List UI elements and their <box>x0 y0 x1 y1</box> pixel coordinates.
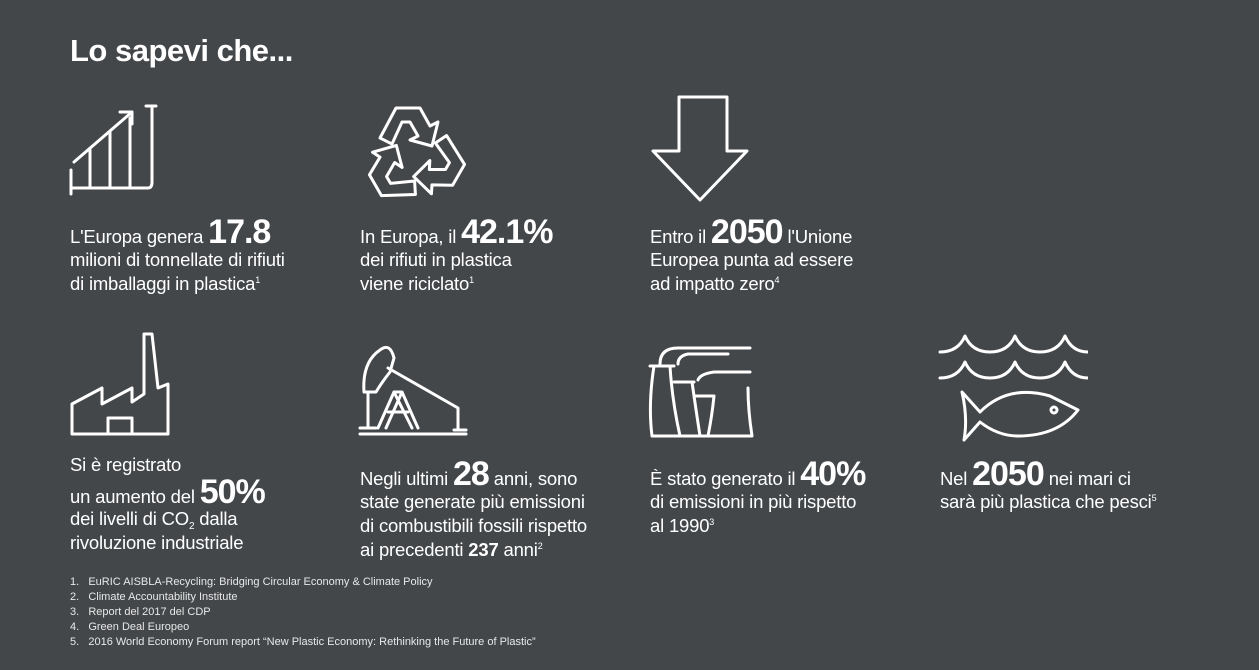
text: more plastic than fish <box>940 455 1156 512</box>
text: 28 years: di combustibili fossili rispetto <box>360 515 587 536</box>
icon: factory <box>70 332 170 436</box>
text: 40%: al 19903 <box>650 515 714 536</box>
text: 28 years: Negli ultimi 28 anni, sono <box>360 455 577 493</box>
text: 2050 zero impact <box>650 213 853 294</box>
text: 17.8: L'Europa genera 17.8 <box>70 213 270 251</box>
footnotes: 3. Report del 2017 del CDP <box>70 606 211 618</box>
text: 50% CO2 <box>70 454 265 553</box>
icon: power plant <box>648 346 754 438</box>
text: 2050 zero impact: Europea punta ad essere <box>650 249 853 270</box>
text: 28 years: state generate più emissioni <box>360 491 585 512</box>
text: 42.1%: viene riciclato1 <box>360 273 474 294</box>
text: 42.1%: In Europa, il 42.1% <box>360 213 552 251</box>
text: 42.1% <box>360 213 553 294</box>
icon: waves and fish <box>938 334 1088 442</box>
footnotes: 5. 2016 World Economy Forum report “New Plastic Economy: Rethinking the Future of Plastic” <box>70 636 536 648</box>
text: 17.8: milioni di tonnellate di rifiuti <box>70 249 285 270</box>
title: Lo sapevi che... <box>70 33 293 68</box>
text: 28 years <box>360 455 587 560</box>
footnotes: 1. EuRIC AISBLA-Recycling: Bridging Circular Economy & Climate Policy <box>70 576 433 588</box>
text: 50% CO2: dei livelli di CO2 dalla <box>70 508 237 532</box>
text: 17.8: di imballaggi in plastica1 <box>70 273 260 294</box>
icon: growth chart <box>70 104 158 196</box>
text: 2050 zero impact: ad impatto zero4 <box>650 273 779 294</box>
text: 42.1%: dei rifiuti in plastica <box>360 249 512 270</box>
text: 17.8 <box>70 213 285 294</box>
text: 28 years: ai precedenti 237 anni2 <box>360 539 542 560</box>
text: 40%: È stato generato il 40% <box>650 455 865 493</box>
text: 50% CO2: rivoluzione industriale <box>70 532 243 553</box>
text: 40%: di emissioni in più rispetto <box>650 491 856 512</box>
footnotes <box>70 576 536 648</box>
text: more plastic than fish: Nel 2050 nei mari ci <box>940 455 1131 493</box>
icon: oil pump <box>358 346 468 436</box>
icon: down arrow <box>651 96 748 202</box>
text: 2050 zero impact: Entro il 2050 l'Unione <box>650 213 852 251</box>
text: 40% <box>650 455 866 536</box>
text: 50% CO2: Si è registrato <box>70 454 181 475</box>
footnotes: 4. Green Deal Europeo <box>70 621 189 633</box>
text: 50% CO2: un aumento del 50% <box>70 473 265 511</box>
icon: recycle <box>368 106 466 198</box>
footnotes: 2. Climate Accountability Institute <box>70 591 238 603</box>
text: more plastic than fish: sarà più plastica che pesci5 <box>940 491 1156 512</box>
